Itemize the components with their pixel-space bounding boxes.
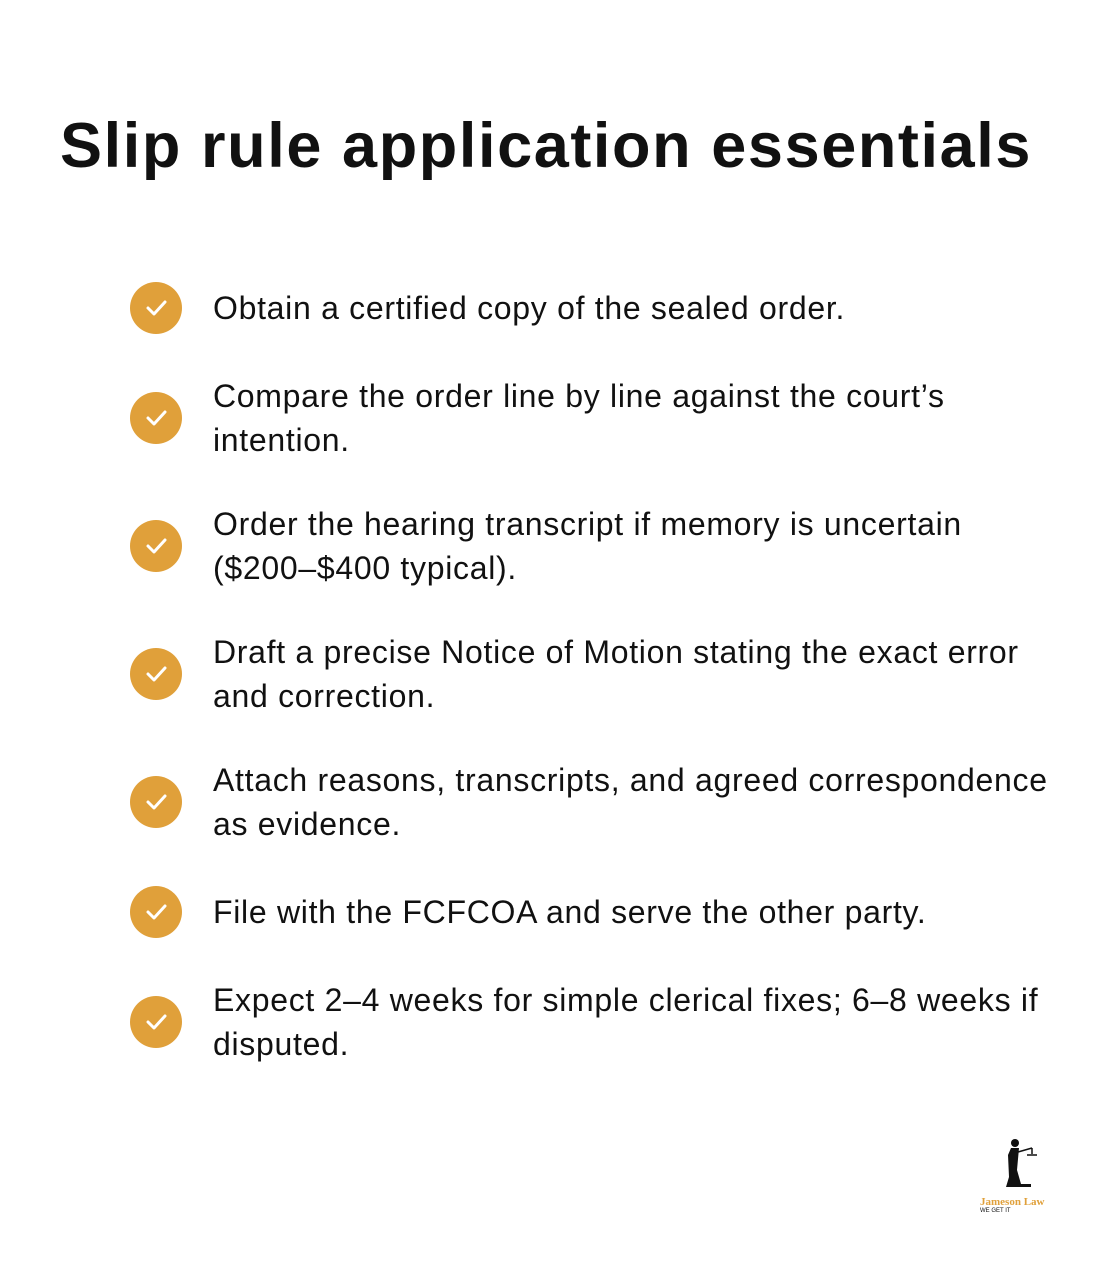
item 2 — [130, 378, 945, 458]
text: File with the FCFCOA and serve the other party. — [213, 894, 926, 930]
logo — [980, 1139, 1044, 1214]
icon: check — [130, 392, 182, 444]
text: Order the hearing transcript if memory is uncertain — [213, 506, 962, 542]
logo: Jameson Law — [980, 1196, 1044, 1208]
item 3 — [130, 506, 962, 586]
icon: check — [130, 996, 182, 1048]
icon: check — [130, 776, 182, 828]
item 5 — [130, 762, 1048, 842]
text: and correction. — [213, 678, 435, 714]
text: disputed. — [213, 1026, 349, 1062]
text: Attach reasons, transcripts, and agreed correspondence — [213, 762, 1048, 798]
item 6 — [130, 886, 926, 938]
icon: check — [130, 520, 182, 572]
text: Compare the order line by line against the court’s — [213, 378, 945, 414]
item 7 — [130, 982, 1038, 1062]
text: Draft a precise Notice of Motion stating the exact error — [213, 634, 1019, 670]
icon: check — [130, 886, 182, 938]
item 1 — [130, 282, 845, 334]
text: intention. — [213, 422, 350, 458]
title: Slip rule application essentials — [60, 111, 1032, 181]
logo: WE GET IT — [980, 1208, 1011, 1214]
text: Expect 2–4 weeks for simple clerical fixes; 6–8 weeks if — [213, 982, 1038, 1018]
text: ($200–$400 typical). — [213, 550, 517, 586]
icon: check — [130, 282, 182, 334]
item 4 — [130, 634, 1019, 714]
text: Obtain a certified copy of the sealed order. — [213, 290, 845, 326]
icon: check — [130, 648, 182, 700]
text: as evidence. — [213, 806, 401, 842]
